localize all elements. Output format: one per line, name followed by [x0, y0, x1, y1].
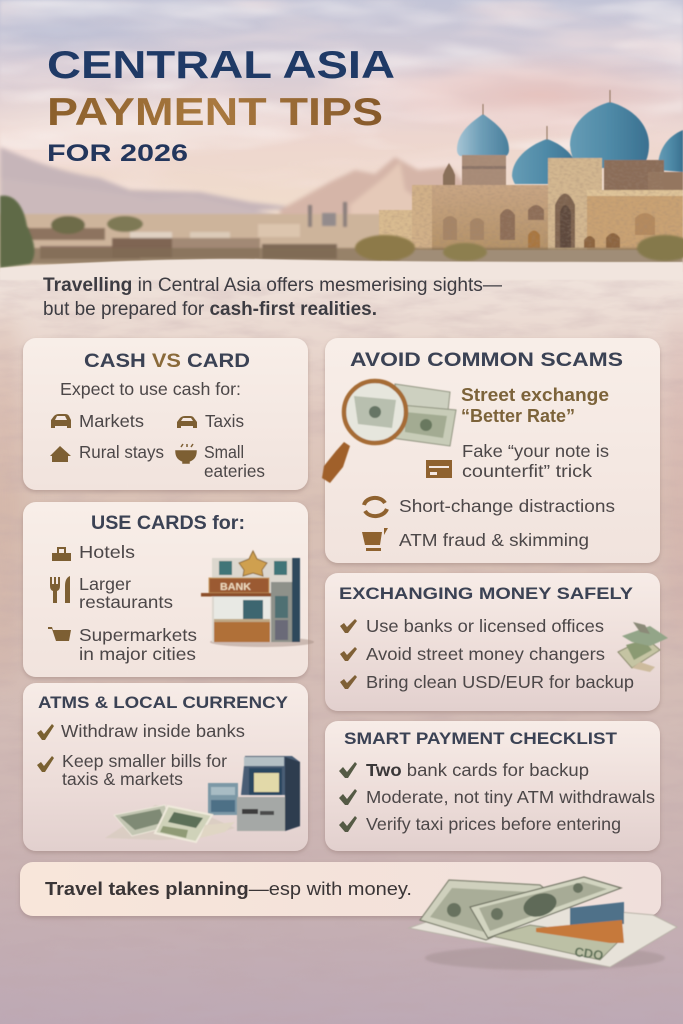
panel: closing banner — [20, 862, 677, 970]
item: verify taxi prices: Verify taxi prices before entering — [366, 814, 621, 834]
icon: sync — [364, 498, 387, 516]
item: bring clean: Bring clean USD/EUR for backup — [366, 672, 634, 692]
item: markets: Markets — [79, 411, 144, 431]
item: withdraw inside banks: Withdraw inside banks — [61, 721, 245, 741]
check — [37, 756, 54, 772]
check — [37, 724, 54, 740]
title: PAYMENT TIPS — [47, 91, 383, 134]
illustration: flying banknotes — [618, 622, 668, 672]
icon: bowl — [176, 444, 196, 463]
icon: cart — [362, 528, 388, 551]
heading: use cards: USE CARDS for: — [91, 513, 245, 534]
item: supermarkets: Supermarkets — [79, 625, 197, 645]
illustration: magnifier and banknotes — [322, 381, 456, 483]
icon: cart — [48, 627, 71, 641]
item: small eateries second line: eateries — [204, 461, 265, 481]
town — [0, 202, 400, 264]
heading: exchanging money: EXCHANGING MONEY SAFELY — [339, 585, 633, 603]
item: atm fraud: ATM fraud & skimming — [399, 530, 589, 550]
item: rural stays: Rural stays — [79, 442, 164, 462]
check — [339, 762, 357, 778]
title: CENTRAL ASIA — [47, 44, 395, 87]
illustration: stack of banknotes and cards — [409, 877, 677, 970]
item: small eateries: Small — [204, 442, 244, 462]
icon: car — [51, 414, 71, 428]
heading: cash vs card: CASH VS CARD — [84, 351, 250, 372]
item: two bank cards: Two bank cards for backup — [366, 760, 589, 780]
illustration: atm and banknotes — [105, 756, 300, 842]
title — [47, 44, 395, 167]
illustration: bank — [201, 551, 314, 647]
item: short-change: Short-change distractions — [399, 496, 615, 516]
paper edge — [0, 259, 683, 280]
illustration: stack of banknotes and cards: CDO — [574, 944, 604, 963]
panel: exchanging money safely — [325, 573, 668, 711]
item: fake note trick: Fake “your note is — [462, 441, 609, 461]
item: avoid street changers: Avoid street money changers — [366, 644, 605, 664]
item: moderate withdrawals: Moderate, not tiny ATM withdrawals — [366, 787, 655, 807]
item: larger restaurants: Larger — [79, 574, 131, 594]
panel: atms and local currency — [23, 683, 308, 851]
heading: atms: ATMS & LOCAL CURRENCY — [38, 694, 288, 712]
panel: cash vs card — [23, 338, 308, 490]
panel: use cards — [23, 502, 314, 677]
title: FOR 2026 — [47, 140, 188, 167]
intro text: Travelling in Central Asia offers mesmerising sights— — [43, 275, 502, 296]
intro text — [43, 275, 502, 320]
item: fake note trick second line: counterfit” trick — [462, 461, 592, 481]
check — [340, 647, 357, 661]
item: major cities: in major cities — [79, 644, 196, 664]
icon: taxi — [177, 416, 197, 428]
heading: scams: AVOID COMMON SCAMS — [350, 350, 623, 371]
check — [339, 816, 357, 832]
intro text: but be prepared for cash-first realities. — [43, 299, 377, 320]
subheading: Expect to use cash for: — [60, 379, 241, 399]
item: larger restaurants second line: restaurants — [79, 592, 173, 612]
hero illustration: sky, mountains, town and mosque — [0, 0, 683, 280]
icon: house — [50, 446, 71, 462]
heading: checklist: SMART PAYMENT CHECKLIST — [344, 730, 617, 748]
icon: fork and knife — [50, 576, 70, 603]
panel: smart payment checklist — [325, 721, 660, 851]
icon: hotel — [52, 547, 71, 561]
item: better rate: “Better Rate” — [461, 406, 575, 426]
mosque — [379, 90, 683, 250]
item: keep smaller bills second line: taxis & markets — [62, 769, 183, 789]
item: street exchange: Street exchange — [461, 385, 609, 405]
mountains — [0, 147, 470, 235]
check — [340, 675, 357, 689]
check — [340, 619, 357, 633]
check — [339, 789, 357, 805]
item: taxis: Taxis — [205, 411, 244, 431]
illustration: bank: BANK — [220, 581, 251, 593]
item: use banks: Use banks or licensed offices — [366, 616, 604, 636]
icon: card — [426, 460, 452, 478]
item: keep smaller bills: Keep smaller bills for — [62, 751, 227, 771]
closing text: Travel takes planning —esp with money. — [45, 879, 412, 899]
panel: avoid common scams — [322, 338, 660, 563]
item: hotels: Hotels — [79, 542, 135, 562]
